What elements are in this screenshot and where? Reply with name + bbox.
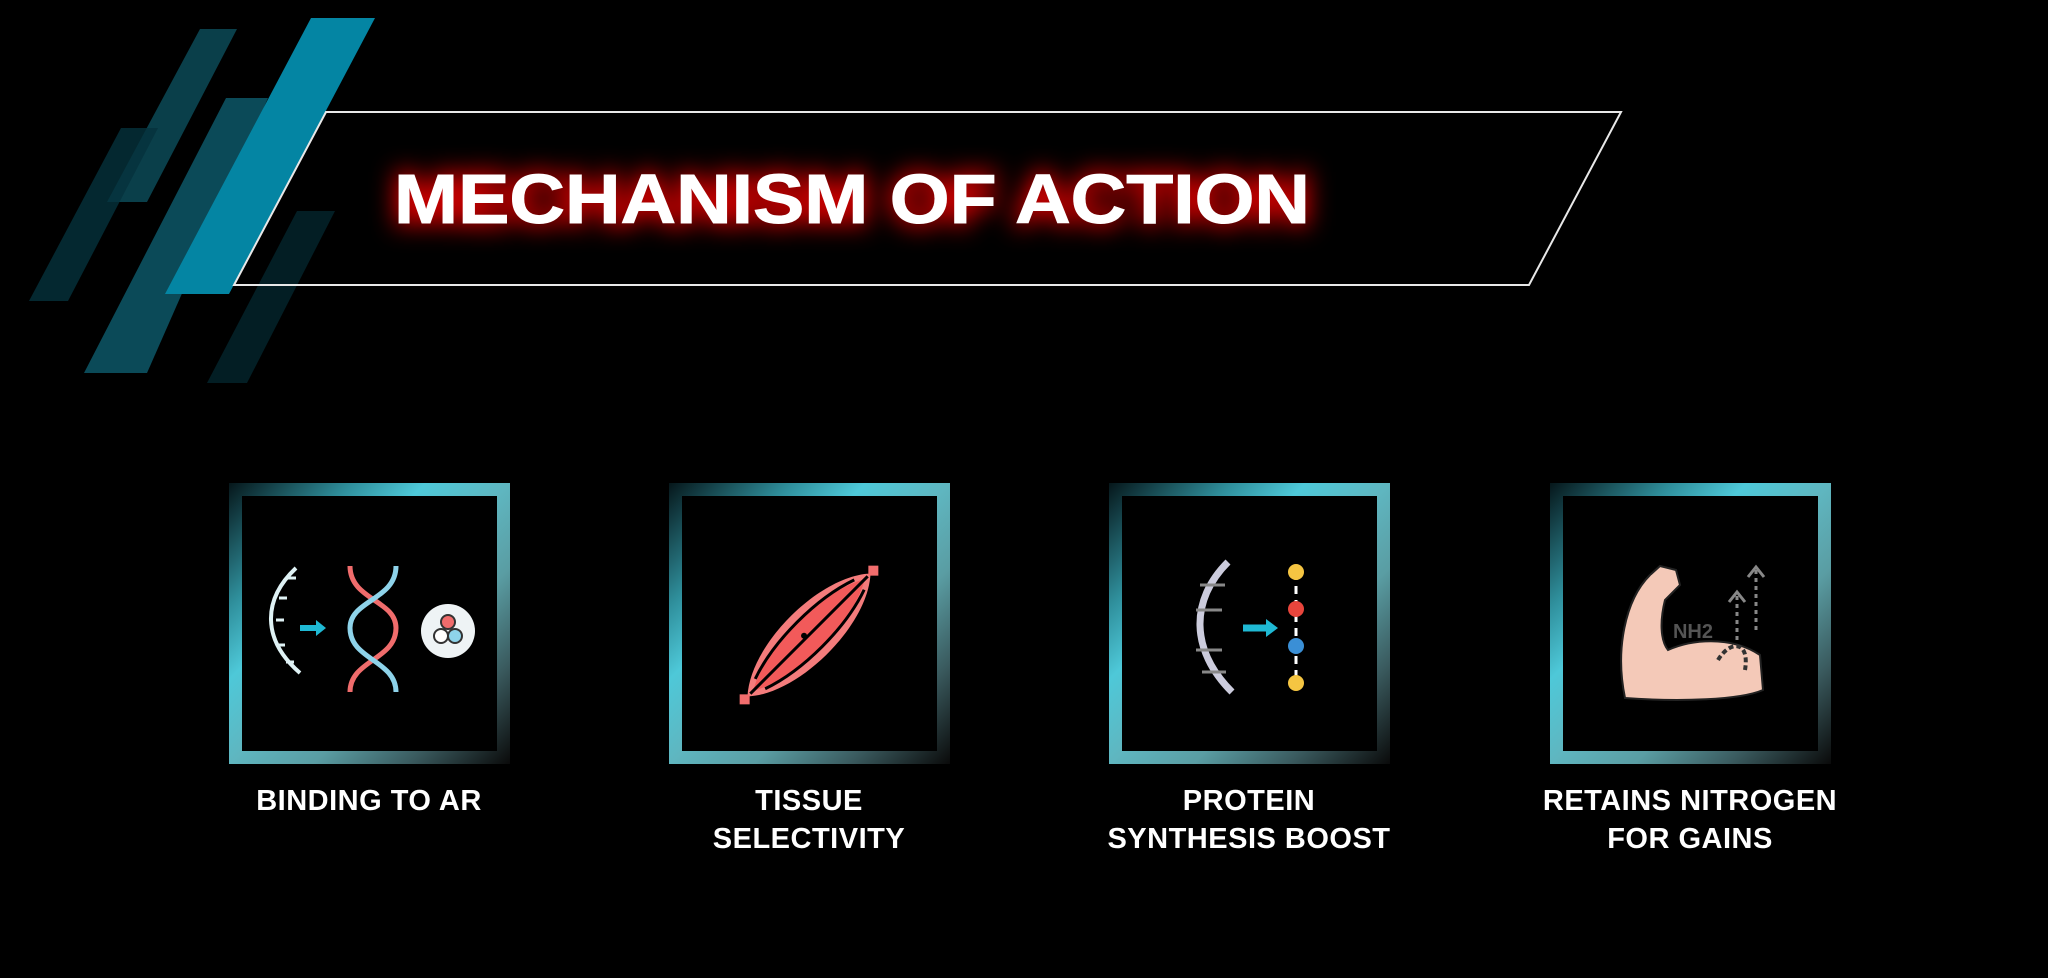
icon: muscle xyxy=(721,547,897,723)
panel: nitrogen xyxy=(1550,483,1831,764)
label: nitrogen: FOR GAINS xyxy=(1607,823,1773,855)
label: protein: PROTEIN xyxy=(1183,785,1315,817)
label: tissue: TISSUE xyxy=(755,785,863,817)
title: MECHANISM OF ACTION xyxy=(394,160,1310,238)
label: protein xyxy=(1107,785,1391,855)
title banner xyxy=(232,111,1623,286)
panel: protein synthesis xyxy=(1109,483,1390,764)
label: tissue: SELECTIVITY xyxy=(713,823,905,855)
panel: tissue selectivity xyxy=(669,483,950,764)
panel: binding to AR xyxy=(229,483,510,764)
icon: protein synthesis xyxy=(1196,562,1304,692)
icon: DNA binding xyxy=(271,566,475,692)
label: tissue xyxy=(713,785,905,855)
title banner: MECHANISM OF ACTION xyxy=(394,160,1310,238)
icon: flexed arm: NH2 xyxy=(1673,621,1713,643)
label: nitrogen: RETAINS NITROGEN xyxy=(1543,785,1837,817)
label: protein: SYNTHESIS BOOST xyxy=(1107,823,1391,855)
icon: flexed arm xyxy=(1621,566,1764,700)
label: binding: BINDING TO AR xyxy=(256,785,482,817)
label: nitrogen xyxy=(1543,785,1837,855)
